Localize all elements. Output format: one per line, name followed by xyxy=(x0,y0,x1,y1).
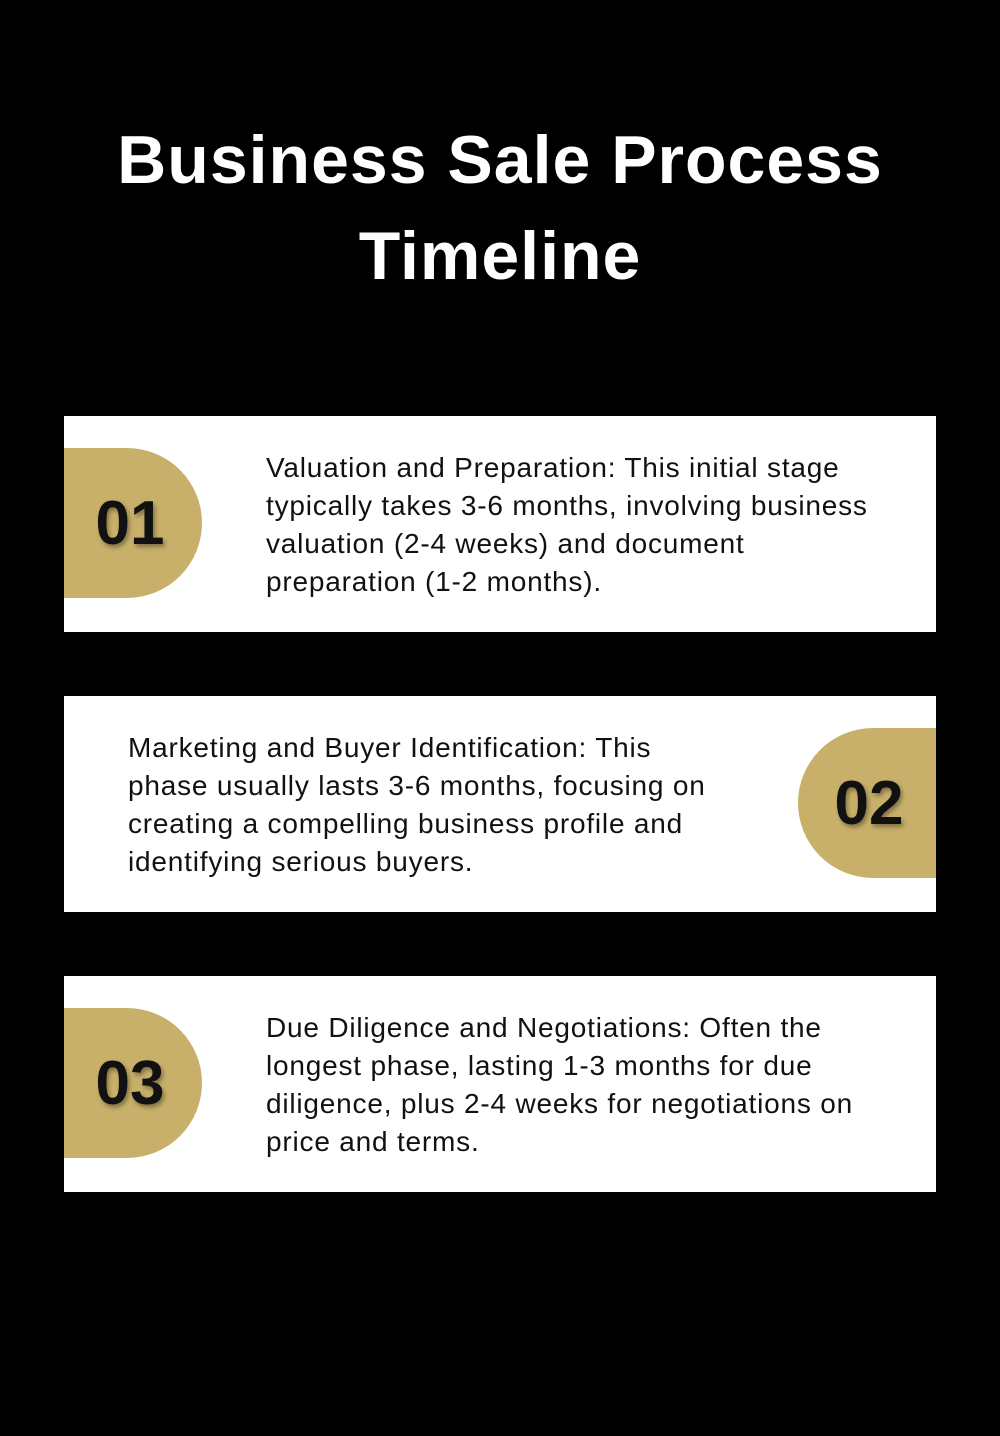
badge: 01 xyxy=(64,448,202,598)
text: step 2: creating a compelling business profile and xyxy=(128,808,683,839)
text: step 1: valuation (2-4 weeks) and document xyxy=(266,528,745,559)
text: step 2 xyxy=(128,732,706,877)
badge: 02: 02 xyxy=(835,768,903,838)
badge: 03: 03 xyxy=(96,1048,164,1118)
title: Timeline xyxy=(359,218,641,294)
text: step 3: price and terms. xyxy=(266,1126,480,1157)
title: Business Sale Process xyxy=(117,122,883,198)
text: step 1: Valuation and Preparation: This initial stage xyxy=(266,452,840,483)
text: step 1: preparation (1-2 months). xyxy=(266,566,602,597)
text: step 2: phase usually lasts 3-6 months, focusing on xyxy=(128,770,706,801)
text: step 2: Marketing and Buyer Identification: This xyxy=(128,732,651,763)
panel: step 1 xyxy=(64,416,936,632)
text: step 1 xyxy=(266,452,868,597)
panel: step 3 xyxy=(64,976,936,1192)
text: step 3: longest phase, lasting 1-3 months for due xyxy=(266,1050,812,1081)
title xyxy=(117,122,883,294)
text: step 3 xyxy=(266,1012,853,1157)
badge: 02 xyxy=(798,728,936,878)
text: step 2: identifying serious buyers. xyxy=(128,846,473,877)
badge: 01: 01 xyxy=(96,488,164,558)
text: step 3: diligence, plus 2-4 weeks for negotiations on xyxy=(266,1088,853,1119)
text: step 1: typically takes 3-6 months, involving business xyxy=(266,490,868,521)
badge: 03 xyxy=(64,1008,202,1158)
panel: step 2 xyxy=(64,696,936,912)
text: step 3: Due Diligence and Negotiations: Often the xyxy=(266,1012,822,1043)
